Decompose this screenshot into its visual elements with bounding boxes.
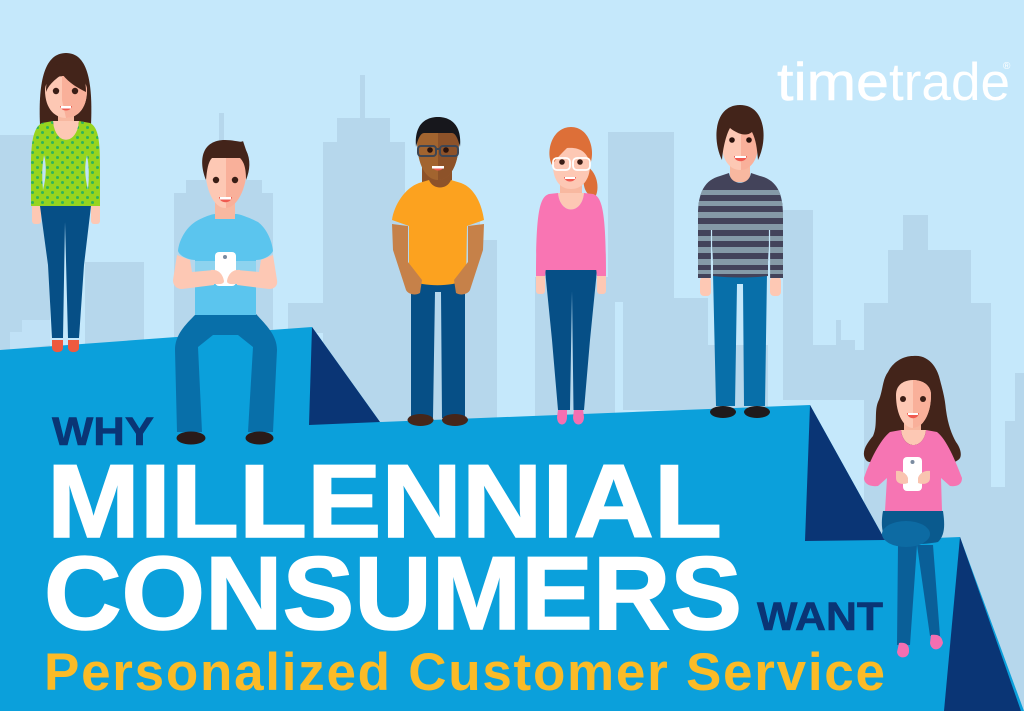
heading: CONSUMERS: CONSUMERS (44, 536, 742, 652)
heading: WANT: WANT (757, 595, 883, 639)
lighter stairs behind first figure (10, 320, 50, 350)
logo: timetrade: time (777, 53, 889, 112)
figure: red-haired woman in pink top (536, 127, 606, 424)
logo: timetrade: trade (889, 53, 1010, 112)
subtitle: Personalized Customer Service (44, 643, 885, 702)
figure: woman in green top (31, 53, 100, 352)
figure: man in orange t-shirt (392, 117, 484, 426)
heading: WHY: WHY (52, 410, 154, 454)
blue stepped ground (0, 327, 1024, 711)
logo: timetrade: ® (1003, 61, 1011, 72)
figure: man in striped sweater (698, 105, 783, 418)
icon: phone (215, 252, 236, 286)
figure: sitting woman with phone (864, 356, 962, 657)
logo: timetrade (777, 53, 1011, 112)
dark triangle: left step (309, 327, 380, 425)
dark triangle: right step (944, 537, 1021, 711)
heading: MILLENNIAL: MILLENNIAL (47, 444, 722, 560)
dark triangle: middle step (805, 405, 885, 541)
icon: phone (903, 457, 922, 491)
figure: sitting man with phone (173, 140, 277, 444)
